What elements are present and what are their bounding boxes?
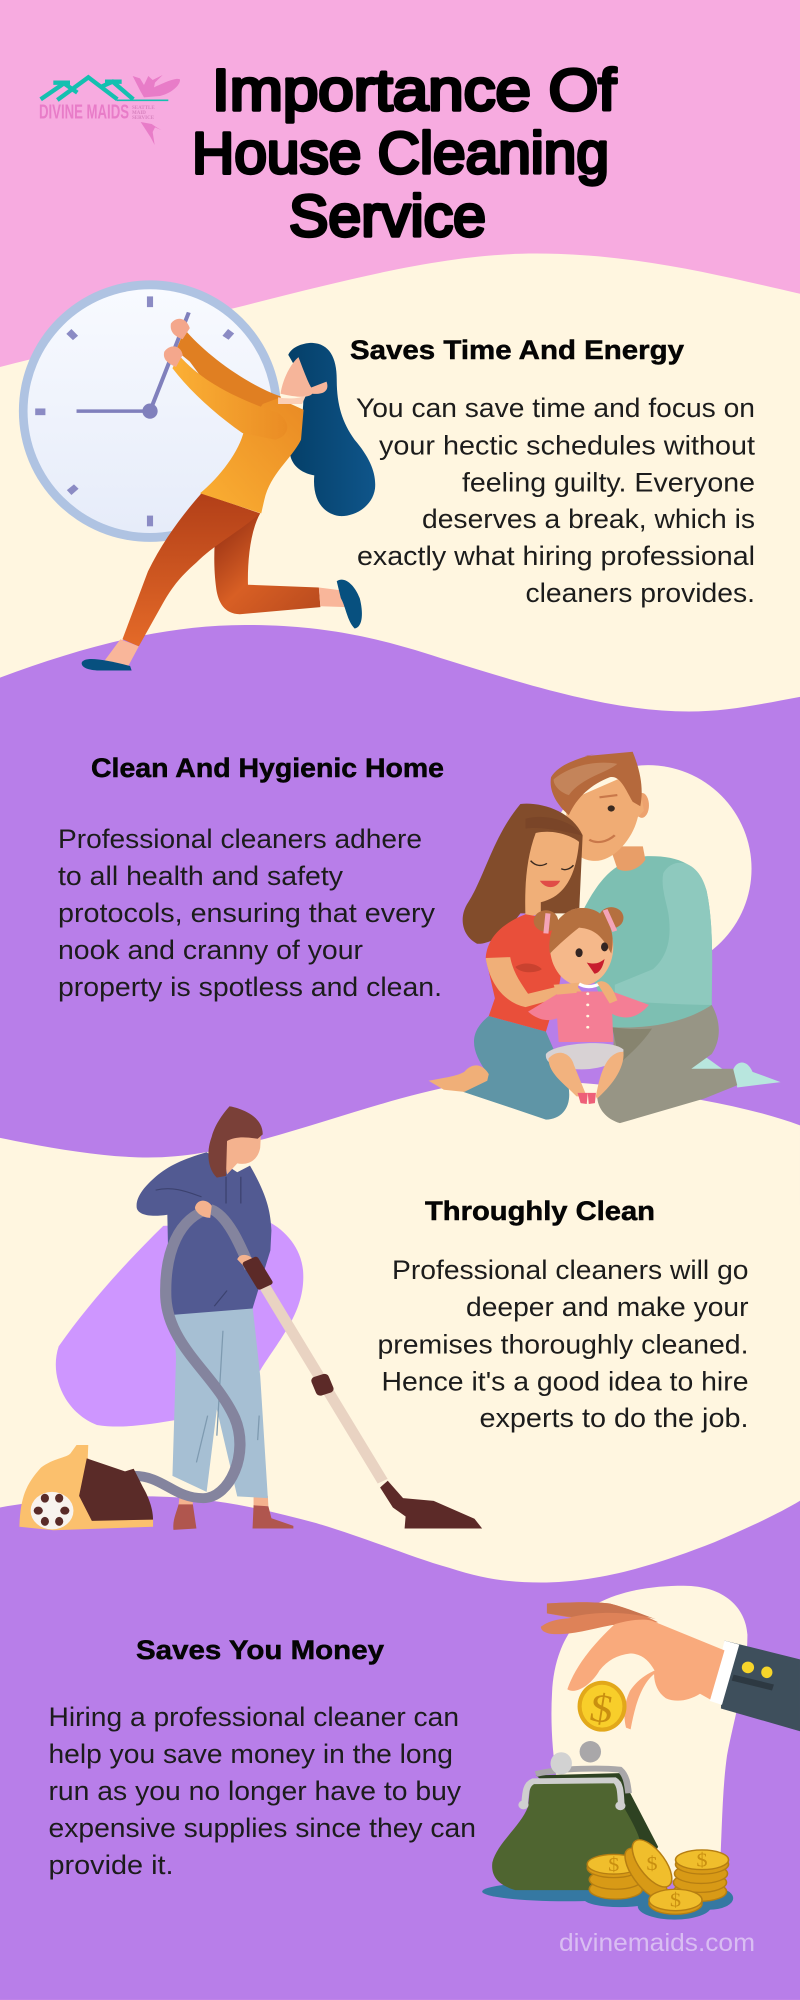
- section two: body text: protocols, ensuring that every: [58, 898, 436, 928]
- trousers: [597, 1005, 737, 1123]
- purse shadow: [482, 1882, 733, 1920]
- section three: heading: Throughly Clean: [425, 1196, 655, 1226]
- rear leg: [214, 513, 320, 614]
- coin: $: [587, 1686, 616, 1732]
- icon: teal house roofs: [41, 77, 168, 100]
- icon: clock: [19, 280, 281, 542]
- section one: body text: [356, 393, 756, 608]
- front leg: [122, 493, 260, 646]
- lilac blob: [56, 1221, 303, 1427]
- footer website: divinemaids.com: [559, 1929, 755, 1957]
- section one: body text: feeling guilty. Everyone: [462, 468, 755, 498]
- panel: purple section four: [0, 1496, 800, 2000]
- cuff buttons: [742, 1662, 772, 1678]
- hands on shoulder: [554, 981, 617, 1004]
- hair: [288, 343, 375, 516]
- section four: body text: [48, 1702, 476, 1880]
- hair: [551, 752, 642, 815]
- dollar signs on coins: $: [608, 1853, 619, 1876]
- coin stacks: [587, 1834, 729, 1914]
- figure: daughter: [528, 907, 649, 1104]
- neck: [610, 846, 645, 871]
- dollar signs on coins: [608, 1849, 708, 1911]
- foot rear: [319, 587, 347, 607]
- head: [566, 773, 644, 861]
- pants: [172, 1306, 268, 1498]
- logo tagline: MAID: [132, 111, 146, 116]
- section four: body text: Hiring a professional cleaner can: [48, 1702, 459, 1732]
- section one: body text: deserves a break, which is: [422, 504, 755, 534]
- sleeve: [721, 1641, 800, 1731]
- logo tagline: SERVICE: [132, 116, 155, 121]
- back fingers: [541, 1602, 658, 1634]
- section two: body text: Professional cleaners adhere: [58, 824, 422, 854]
- vacuum pole: [258, 1275, 383, 1481]
- illustration: woman vacuuming: [19, 1106, 482, 1530]
- cream circle behind family: [544, 765, 752, 972]
- figure: father: [551, 752, 781, 1123]
- sweater: [582, 856, 712, 1028]
- dollar signs on coins: $: [646, 1852, 658, 1875]
- socks: [179, 1496, 268, 1506]
- hoodie: [137, 1152, 271, 1315]
- pole clip: [310, 1373, 335, 1397]
- section two: body text: [58, 824, 442, 1002]
- shirt: [486, 914, 569, 1032]
- foot front: [105, 639, 139, 667]
- section four: body text: run as you no longer have to buy: [48, 1776, 462, 1806]
- section one: body text: exactly what hiring professional: [357, 541, 755, 571]
- section three: body text: Professional cleaners will go: [392, 1255, 748, 1285]
- section two: heading: Clean And Hygienic Home: [91, 753, 444, 783]
- section two: body text: to all health and safety: [58, 861, 344, 891]
- section one: heading: Saves Time And Energy: [350, 335, 684, 365]
- vacuum hose: [134, 1209, 250, 1498]
- section three: body text: Hence it's a good idea to hire: [382, 1366, 748, 1396]
- head: [534, 910, 558, 932]
- logo tagline: SEATTLE: [132, 106, 155, 111]
- section four: body text: help you save money in the long: [48, 1739, 453, 1769]
- section one: body text: cleaners provides.: [526, 578, 755, 608]
- section two: body text: nook and cranny of your: [58, 935, 363, 965]
- section three: body text: premises thoroughly cleaned.: [378, 1330, 748, 1360]
- ear: [635, 793, 649, 818]
- section three: body text: experts to do the job.: [480, 1403, 748, 1433]
- illustration: hand dropping coin into purse: [482, 1586, 800, 1920]
- vacuum nozzle: [380, 1481, 482, 1529]
- face and neck: [525, 832, 579, 918]
- figure: mother: [429, 804, 583, 1120]
- eyes and smile: [608, 805, 615, 812]
- hands: [164, 319, 190, 367]
- front arm: [172, 355, 287, 440]
- title: Service: [289, 184, 486, 249]
- title: Importance Of: [212, 58, 617, 123]
- section four: heading: Saves You Money: [136, 1635, 384, 1665]
- hand: [195, 1201, 255, 1273]
- arm: [486, 957, 582, 1007]
- back arm: [176, 329, 286, 431]
- head skin: [223, 1130, 261, 1175]
- vacuum body: [19, 1445, 153, 1530]
- hand: [567, 1620, 724, 1729]
- section three: body text: [378, 1255, 749, 1433]
- jeans: [463, 1016, 569, 1120]
- section one: body text: your hectic schedules without: [379, 430, 756, 460]
- logo: Divine Maids: [39, 75, 180, 145]
- figure: woman: [82, 319, 375, 670]
- socks: [689, 1054, 781, 1087]
- title: [192, 58, 617, 249]
- cream blob: [551, 1586, 747, 1880]
- purse: [492, 1741, 658, 1890]
- handle grip: [242, 1256, 274, 1291]
- title: House Cleaning: [192, 121, 609, 186]
- hair: [208, 1106, 263, 1178]
- hair: [463, 804, 583, 944]
- legs and dress: [546, 1043, 624, 1069]
- section four: body text: provide it.: [48, 1850, 174, 1880]
- panel: cream section one: [0, 254, 800, 759]
- dollar signs on coins: $: [696, 1849, 708, 1871]
- section two: body text: property is spotless and clean.: [58, 972, 442, 1002]
- face: [281, 357, 327, 397]
- section four: body text: expensive supplies since they can: [48, 1813, 476, 1843]
- panel: cream section three: [0, 1081, 800, 1607]
- illustration: woman pushing clock hands: [19, 280, 375, 670]
- dollar signs on coins: $: [670, 1889, 681, 1911]
- panel: purple section two: [0, 625, 800, 1205]
- icon: pink fairy: [133, 75, 180, 145]
- illustration: family hugging: [429, 752, 781, 1123]
- cuff: [710, 1641, 739, 1705]
- torso: [200, 398, 304, 513]
- coin: [578, 1681, 627, 1732]
- section one: body text: You can save time and focus on: [356, 393, 755, 423]
- section three: body text: deeper and make your: [466, 1292, 749, 1322]
- logo wordmark: DIVINE MAIDS: [39, 100, 129, 124]
